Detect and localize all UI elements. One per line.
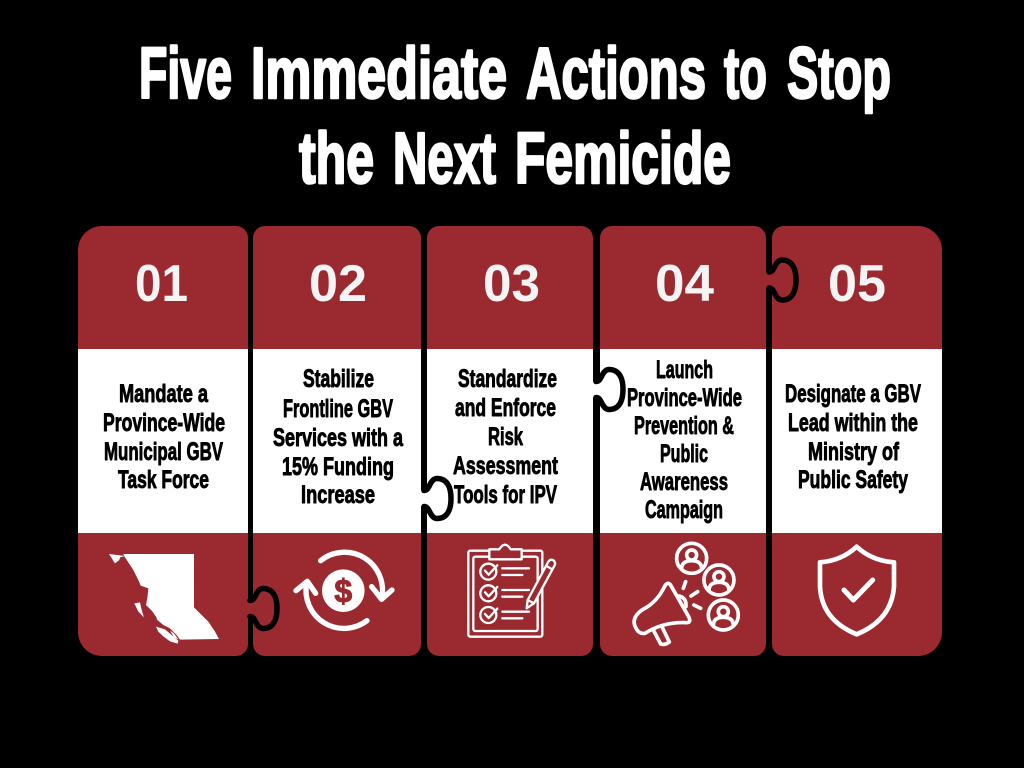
text: action 05: Public Safety — [798, 466, 908, 494]
title: Femicide — [515, 119, 731, 199]
text: action 01: Task Force — [118, 466, 209, 494]
icon: funding cycle: $ — [334, 573, 352, 609]
text: action 02 — [273, 365, 404, 509]
text: action 01 — [103, 380, 225, 494]
number 04: 04 — [655, 255, 714, 313]
text: action 04: Province-Wide — [627, 384, 742, 412]
text: action 01: Province-Wide — [103, 409, 225, 437]
text: action 02: Services with a — [273, 424, 404, 452]
connector: puzzle tab 2 to 3 — [421, 478, 451, 518]
connector: puzzle tab 3 to 4 — [593, 370, 623, 410]
panel: action 02 — [253, 226, 421, 656]
text: action 02: Stabilize — [303, 365, 374, 393]
icon: megaphone and people — [634, 543, 738, 644]
text: action 04: Public — [660, 440, 708, 468]
icon: British Columbia map — [109, 554, 219, 644]
text: action 04: Campaign — [645, 496, 723, 524]
text: action 02: 15% Funding — [282, 453, 394, 481]
number 03: 03 — [483, 255, 540, 313]
panel: action 04 — [600, 226, 766, 656]
text: action 05: Ministry of — [808, 438, 899, 466]
title: Next — [393, 119, 496, 199]
text: action 03 — [453, 365, 558, 509]
title: the — [299, 119, 374, 199]
number 05: 05 — [828, 255, 886, 313]
connector: puzzle tab 1 to 2 — [247, 588, 277, 628]
connector: puzzle tab 4 to 5 — [766, 260, 796, 300]
text: action 03: Tools for IPV — [454, 481, 557, 509]
title: to — [724, 34, 767, 114]
text: action 03: Assessment — [453, 452, 558, 480]
text: action 03: and Enforce — [455, 394, 556, 422]
text: action 01: Municipal GBV — [104, 438, 223, 466]
title: Actions — [526, 34, 706, 114]
icon: shield with check — [820, 547, 894, 634]
text: action 02: Increase — [301, 481, 375, 509]
title — [139, 34, 891, 199]
text: action 03: Risk — [488, 423, 523, 451]
text: action 05: Designate a GBV — [785, 380, 921, 408]
text: action 05 — [785, 380, 921, 494]
title: Five — [139, 34, 232, 114]
text: action 05: Lead within the — [788, 409, 918, 437]
text: action 04 — [627, 356, 742, 524]
number 02: 02 — [309, 255, 367, 313]
title: Immediate — [251, 34, 507, 114]
text: action 04: Launch — [656, 356, 713, 384]
text: action 01: Mandate a — [119, 380, 209, 408]
text: action 04: Prevention & — [634, 412, 734, 440]
icon: clipboard checklist — [468, 545, 555, 637]
text: action 04: Awareness — [640, 468, 728, 496]
number 01: 01 — [135, 255, 188, 313]
panel: action 01 — [78, 226, 248, 656]
panel: action 03 — [427, 226, 593, 656]
text: action 02: Frontline GBV — [283, 395, 393, 423]
panel: action 05 — [772, 226, 942, 656]
title: Stop — [787, 34, 891, 114]
text: action 03: Standardize — [458, 365, 557, 393]
icon: funding cycle — [296, 552, 392, 628]
